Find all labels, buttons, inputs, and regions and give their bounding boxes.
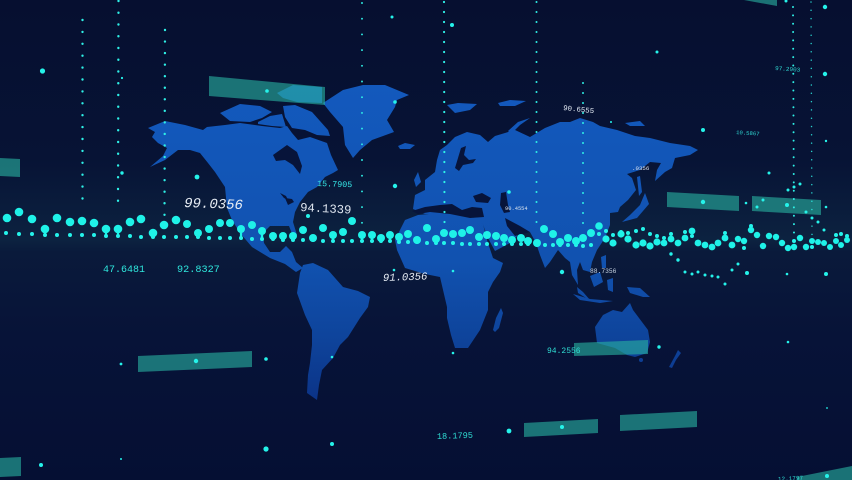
Madagascar (493, 308, 503, 332)
Arctic islands (283, 105, 330, 136)
bar: bottom 1 (524, 419, 598, 437)
Svalbard islands (447, 103, 477, 113)
vertical dotted lines (82, 1, 812, 235)
Eurasia (413, 118, 698, 285)
bar: top right (744, 0, 777, 6)
Sakhalin (637, 176, 642, 196)
Africa (395, 213, 503, 348)
wave stems (45, 229, 576, 245)
Southeast Asia islands (577, 287, 590, 300)
value 47.6481: 47.6481 (103, 265, 145, 276)
data value labels (103, 65, 804, 480)
value 97.2903: 97.2903 (775, 65, 801, 74)
UK (414, 172, 421, 187)
value .0356: .0356 (632, 165, 650, 172)
value 91.0356: 91.0356 (383, 271, 428, 285)
bar: bottom left edge (0, 457, 21, 477)
value 99.0356: 99.0356 (184, 196, 243, 214)
value 18.1795: 18.1795 (437, 431, 473, 442)
New Zealand (669, 350, 681, 368)
value 92.8327: 92.8327 (177, 265, 220, 276)
world map (148, 85, 698, 400)
bar: Greenland top (209, 76, 325, 105)
bar: left edge (0, 158, 20, 177)
bar: right 1 (667, 192, 739, 211)
value 88.7356: 88.7356 (590, 268, 617, 275)
bar: Australia (574, 340, 648, 356)
bar: bottom 2 (620, 411, 697, 431)
bar: bottom right (797, 466, 852, 480)
value 94.2556: 94.2556 (547, 347, 581, 356)
value 90.6555: 90.6555 (563, 105, 594, 116)
Australia (595, 303, 650, 357)
value 15.7905: 15.7905 (317, 179, 352, 190)
wave series: large dots (3, 208, 850, 251)
South America (297, 263, 370, 400)
North America (148, 121, 338, 272)
bar: right 2 (752, 196, 821, 215)
value 94.1339: 94.1339 (300, 201, 352, 218)
Iceland (398, 143, 415, 149)
Japan (622, 193, 649, 222)
Greenland (323, 85, 409, 158)
Tasmania (639, 358, 643, 362)
value 10.5867: 10.5867 (736, 129, 760, 138)
bar: lower left (138, 351, 252, 372)
wave series: small dots (4, 224, 849, 250)
value 90.4554: 90.4554 (505, 206, 528, 212)
map inland seas (273, 145, 530, 236)
